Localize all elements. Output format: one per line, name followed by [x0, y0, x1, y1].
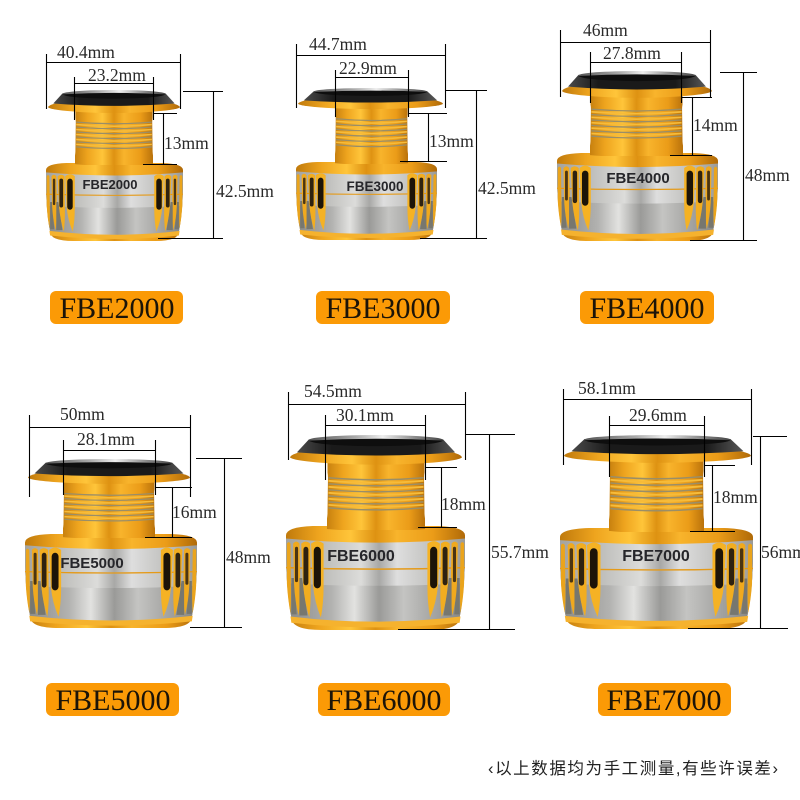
model badge FBE6000: FBE6000 [326, 684, 442, 717]
panel: FBE4000 spool [557, 20, 790, 325]
spool photo FBE5000 [25, 459, 197, 628]
dimension lines FBE6000 [288, 392, 515, 630]
dimension labels FBE5000 [60, 404, 271, 567]
dimension labels FBE7000: 18mm [713, 487, 758, 507]
panel: FBE7000 spool [560, 378, 800, 717]
dimension labels FBE4000 [583, 20, 790, 185]
model badge FBE3000: FBE3000 [325, 292, 441, 325]
dimension labels FBE4000: 14mm [693, 115, 738, 135]
dimension labels FBE6000 [304, 381, 549, 562]
dimension labels FBE5000: 16mm [172, 502, 217, 522]
dimension labels FBE6000: 54.5mm [304, 381, 362, 401]
dimension labels FBE7000: 58.1mm [578, 378, 636, 398]
dimension labels FBE4000: 48mm [745, 165, 790, 185]
dimension labels FBE3000: 22.9mm [339, 58, 397, 78]
spool photo FBE3000: FBE3000 [346, 179, 404, 194]
spool photo FBE5000: FBE5000 [60, 555, 124, 572]
dimension labels FBE6000: 55.7mm [491, 542, 549, 562]
dimension labels FBE5000: 48mm [226, 547, 271, 567]
dimension lines FBE5000 [30, 415, 242, 628]
spool photo FBE2000 [46, 90, 183, 241]
model badge FBE7000: FBE7000 [606, 684, 722, 717]
dimension labels FBE2000: 40.4mm [57, 42, 115, 62]
dimension labels FBE3000: 13mm [429, 131, 474, 151]
spool photo FBE6000: FBE6000 [327, 548, 395, 565]
dimension labels FBE4000: 27.8mm [603, 43, 661, 63]
panel: FBE5000 spool [25, 404, 271, 717]
spool photo FBE3000 [296, 88, 443, 240]
model badge FBE2000: FBE2000 [59, 292, 175, 325]
dimension labels FBE7000: 29.6mm [629, 405, 687, 425]
dimension labels FBE2000: 42.5mm [216, 181, 274, 201]
dimension labels FBE6000: 30.1mm [336, 405, 394, 425]
dimension labels FBE5000: 28.1mm [77, 429, 135, 449]
dimension lines FBE4000 [560, 30, 757, 240]
dimension labels FBE6000: 18mm [441, 494, 486, 514]
spool photo FBE4000 [557, 71, 718, 241]
dimension labels FBE7000 [578, 378, 800, 562]
spool photo FBE4000: FBE4000 [606, 170, 670, 187]
panel: FBE6000 spool [286, 381, 549, 717]
dimension labels FBE3000: 42.5mm [478, 178, 536, 198]
dimension labels FBE5000: 50mm [60, 404, 105, 424]
dimension labels FBE2000: 23.2mm [88, 65, 146, 85]
dimension labels FBE3000: 44.7mm [309, 34, 367, 54]
model badge FBE5000: FBE5000 [55, 684, 171, 717]
dimension lines FBE3000 [296, 44, 487, 238]
dimension lines FBE2000 [46, 54, 223, 238]
dimension labels FBE2000 [57, 42, 274, 201]
spool photo FBE6000 [286, 435, 465, 630]
model badge FBE4000: FBE4000 [589, 292, 705, 325]
spool photo FBE2000: FBE2000 [83, 177, 137, 192]
dimension lines FBE7000 [564, 389, 788, 628]
dimension labels FBE2000: 13mm [164, 133, 209, 153]
dimension labels FBE4000: 46mm [583, 20, 628, 40]
spool photo FBE7000 [560, 435, 753, 629]
spool photo FBE7000: FBE7000 [622, 548, 690, 565]
panel: FBE3000 spool [296, 34, 536, 325]
footnote: ‹以上数据均为手工测量,有些许误差› [488, 759, 778, 778]
panel: FBE2000 spool [46, 42, 274, 325]
dimension labels FBE3000 [309, 34, 536, 198]
